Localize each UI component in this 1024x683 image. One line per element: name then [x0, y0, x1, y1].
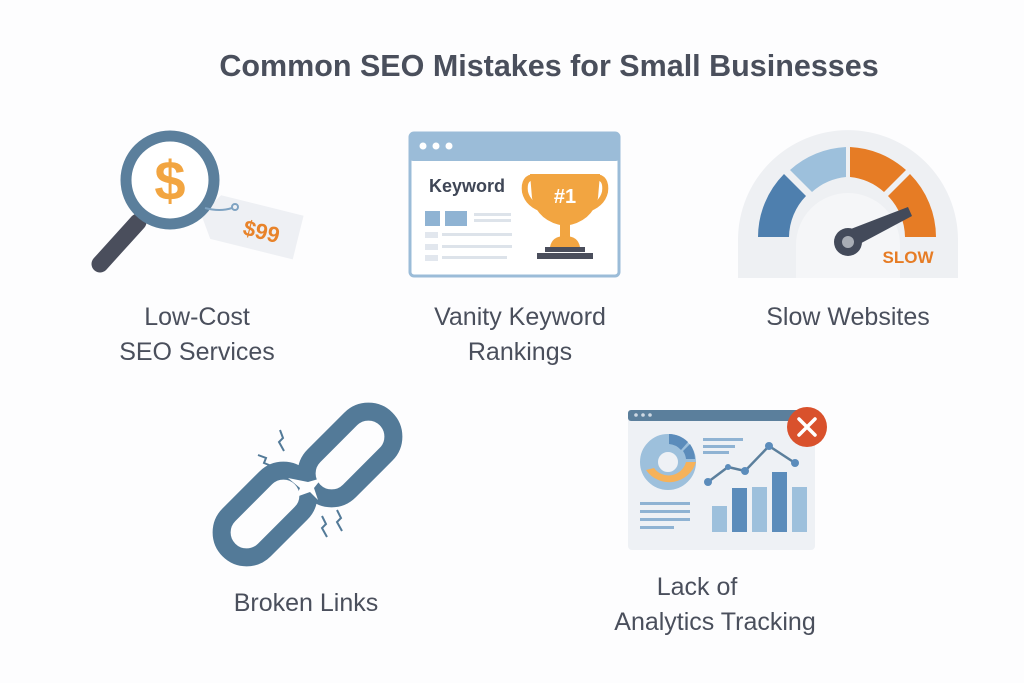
trophy: #1: [554, 186, 576, 208]
label: vanity: Rankings: [468, 338, 572, 366]
icon: magnifier with price tag: $: [154, 149, 186, 212]
label: analytics: Lack of: [657, 573, 737, 601]
trophy: [525, 174, 605, 259]
label: broken links: Broken Links: [234, 589, 378, 617]
label: analytics: Analytics Tracking: [614, 608, 816, 636]
label: vanity: Vanity Keyword: [434, 303, 606, 331]
icon: magnifier with price tag: [100, 136, 304, 264]
icon: speedometer: [738, 130, 958, 278]
title: Common SEO Mistakes for Small Businesses: [219, 49, 879, 83]
icon: magnifier with price tag: $99: [241, 215, 282, 248]
icon: browser with trophy: [410, 133, 619, 276]
label: low-cost: SEO Services: [119, 338, 275, 366]
icon: broken chain: [211, 401, 404, 568]
icon: browser with trophy: Keyword: [429, 176, 505, 196]
label: low-cost: Low-Cost: [144, 303, 250, 331]
label: slow websites: Slow Websites: [766, 303, 930, 331]
icon: speedometer: SLOW: [882, 248, 934, 267]
icon: analytics dashboard: [628, 407, 827, 550]
